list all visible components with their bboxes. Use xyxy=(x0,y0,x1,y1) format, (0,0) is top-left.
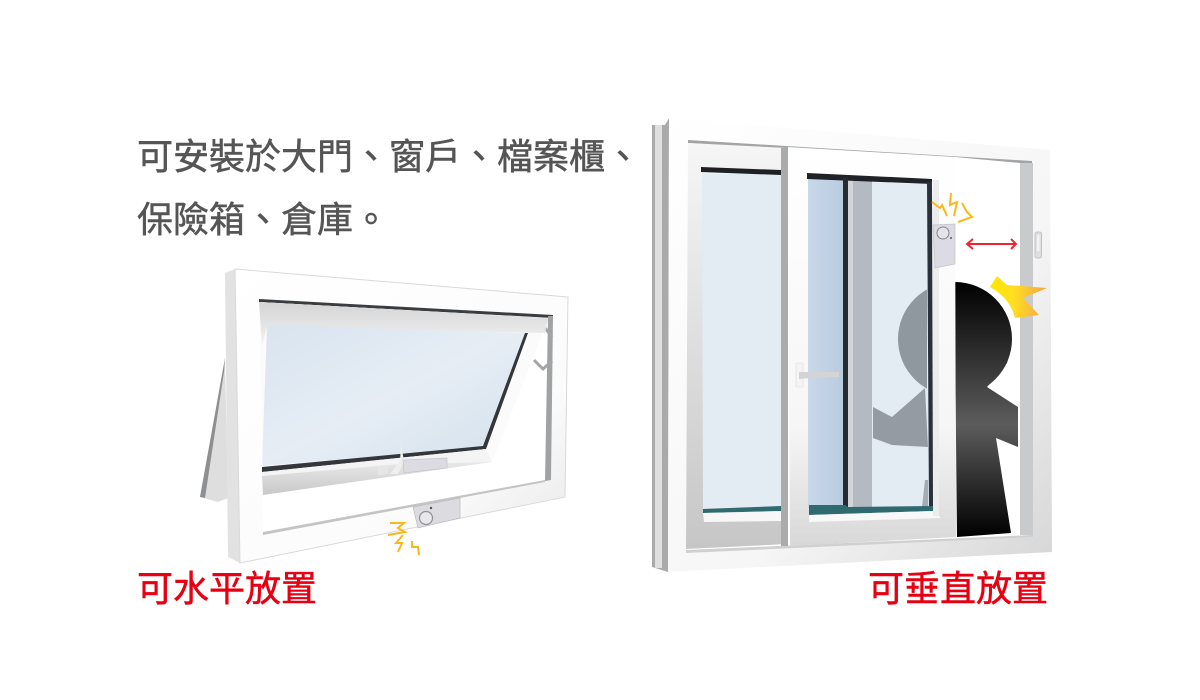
door handle xyxy=(796,363,839,387)
tilted sash with glass xyxy=(259,302,548,495)
outer sliding frame xyxy=(652,118,1052,572)
alarm sensor xyxy=(413,498,460,528)
alarm sensor on sash xyxy=(933,224,955,268)
open sash side profile xyxy=(200,358,228,502)
awning window illustration xyxy=(200,269,568,563)
caption: vertical placement: 可垂直放置 xyxy=(868,568,1048,609)
heading text: 保險箱、倉庫。 xyxy=(137,199,389,240)
magnet on frame xyxy=(1035,232,1042,258)
caption: horizontal placement: 可水平放置 xyxy=(137,568,317,609)
heading text xyxy=(137,136,641,240)
window opening arm xyxy=(534,328,552,369)
icon: yellow lightning bolts xyxy=(932,193,972,222)
yellow impact burst xyxy=(990,276,1047,318)
sash magnet and handle xyxy=(377,445,447,475)
red double arrow xyxy=(967,239,1016,249)
right opening behind sash xyxy=(955,157,1020,537)
person silhouette outside window xyxy=(955,282,1018,537)
sliding window illustration xyxy=(652,118,1052,572)
center sash with glass xyxy=(788,147,956,546)
outer window frame xyxy=(225,269,568,563)
icon: yellow lightning bolts xyxy=(388,523,419,555)
left sash with glass xyxy=(686,143,788,549)
person seen through glass xyxy=(873,290,928,506)
heading text: 可安裝於大門、窗戶、檔案櫃、 xyxy=(137,136,641,177)
